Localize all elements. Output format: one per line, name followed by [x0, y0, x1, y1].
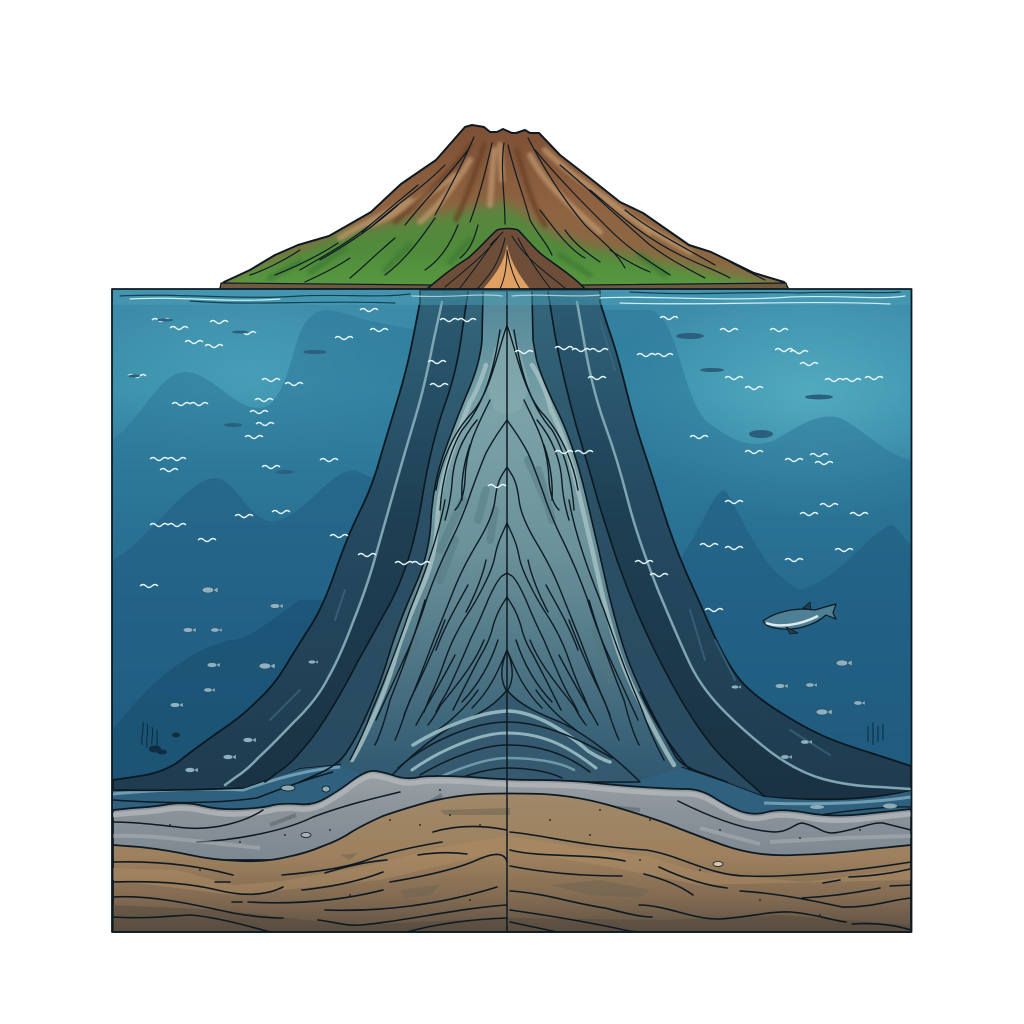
- surface wave lines: [120, 292, 905, 304]
- shore strip: [220, 283, 788, 289]
- outline: [220, 125, 788, 288]
- cone ridges: [445, 232, 565, 289]
- panel: ocean water: [112, 290, 911, 810]
- volcano body: [220, 125, 788, 288]
- seamount: middle band: [265, 292, 764, 796]
- fish, right school: [731, 660, 865, 759]
- background underwater hills: [113, 310, 911, 800]
- seabed strip under the seamount: [113, 755, 911, 822]
- seamount: core fracture lines: [350, 325, 664, 760]
- seamount: band outlines: [265, 292, 764, 796]
- distant dark fish silhouettes: [128, 318, 833, 474]
- seaweed clusters: [142, 722, 883, 754]
- volcano island above the water: [210, 125, 800, 295]
- seamount: rock streaks and pale bands: [225, 302, 911, 789]
- seabed: brown sediment layer: [113, 794, 911, 932]
- seamount: basal arch strata: [386, 690, 640, 782]
- whale: [763, 602, 836, 634]
- section frame: [112, 289, 912, 932]
- lava flow: [483, 244, 530, 289]
- seabed: sediment strata lines: [113, 826, 911, 932]
- sea surface: [112, 289, 911, 305]
- white wave marks in the water: [128, 308, 883, 612]
- seamount: pale core: [340, 292, 683, 780]
- vegetation and ash colouring: [226, 141, 776, 284]
- sediment specks and pebbles: [169, 785, 897, 916]
- small parasitic cone with lava: [427, 228, 585, 289]
- centre section line: [506, 289, 508, 932]
- seamount: dark inner flank: [225, 292, 911, 798]
- infographic: volcanic island cross-section: [111, 124, 912, 933]
- seamount: outer flank: [113, 290, 911, 799]
- seabed: grey sediment layer: [113, 771, 911, 860]
- fish, left school: [170, 587, 318, 772]
- ridge lines: [250, 137, 765, 282]
